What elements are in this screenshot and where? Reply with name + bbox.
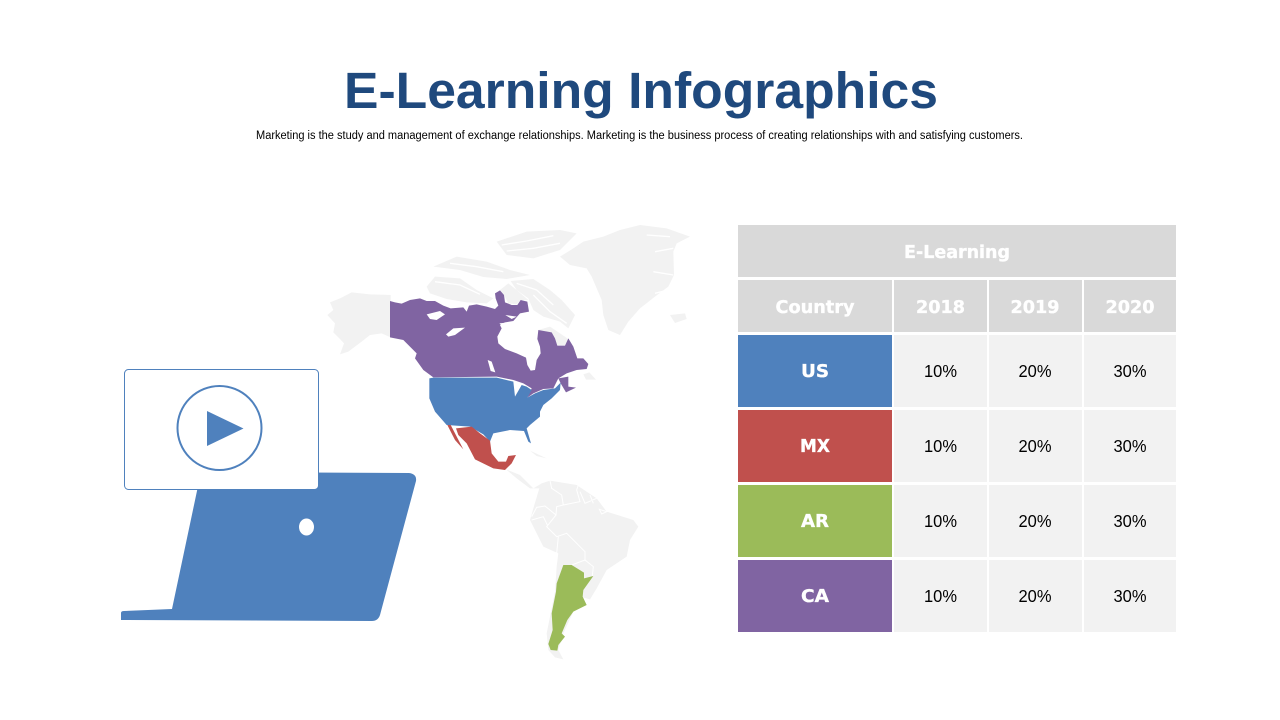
laptop camera dot: [299, 518, 314, 536]
map: grey Central and South America: [506, 451, 638, 659]
map: Canadian lakes: [427, 311, 517, 372]
table row: US: 30%: [1114, 361, 1146, 381]
table row: US: [738, 335, 1176, 407]
table row: MX: 30%: [1114, 436, 1146, 456]
table row: AR: AR: [801, 511, 829, 532]
table row: CA: [738, 560, 1176, 632]
table header row: 2018: [916, 297, 965, 318]
table header row: Country: [776, 297, 855, 318]
subtitle text: Marketing is the study and management of exchange relationships. Marketing is the business process of creating relationships with and satisfying customers.: [256, 130, 1023, 142]
icon: laptop: [121, 472, 416, 621]
table title row: [738, 225, 1176, 277]
table row: AR: 30%: [1114, 511, 1146, 531]
data table: [738, 225, 1176, 632]
laptop with video icon: [121, 370, 416, 621]
table row: CA: CA: [801, 586, 829, 607]
title: E-Learning Infographics: [344, 62, 938, 119]
map: Mexico: [447, 425, 516, 470]
table header row: 2020: [1106, 297, 1154, 318]
map: Argentina: [548, 565, 593, 651]
map: grey northern landmass: [327, 225, 690, 380]
table row: MX: [738, 410, 1176, 482]
table header row: [738, 280, 1176, 332]
table row: AR: 10%: [924, 511, 957, 531]
map: United States: [429, 378, 561, 443]
video screen panel: [124, 370, 318, 490]
icon: play button: [178, 386, 262, 470]
map: Canada: [390, 290, 588, 398]
table row: US: US: [801, 361, 829, 382]
table title row: E-Learning: [904, 242, 1010, 263]
table row: CA: 30%: [1114, 586, 1146, 606]
table row: US: 10%: [924, 361, 957, 381]
table row: MX: MX: [800, 436, 830, 457]
table row: AR: [738, 485, 1176, 557]
world map: the Americas: [327, 225, 690, 659]
table row: CA: 10%: [924, 586, 957, 606]
table row: US: 20%: [1018, 361, 1052, 381]
table row: MX: 20%: [1018, 436, 1052, 456]
table row: AR: 20%: [1018, 511, 1052, 531]
table row: MX: 10%: [924, 436, 957, 456]
table row: CA: 20%: [1018, 586, 1052, 606]
table header row: 2019: [1010, 297, 1060, 318]
